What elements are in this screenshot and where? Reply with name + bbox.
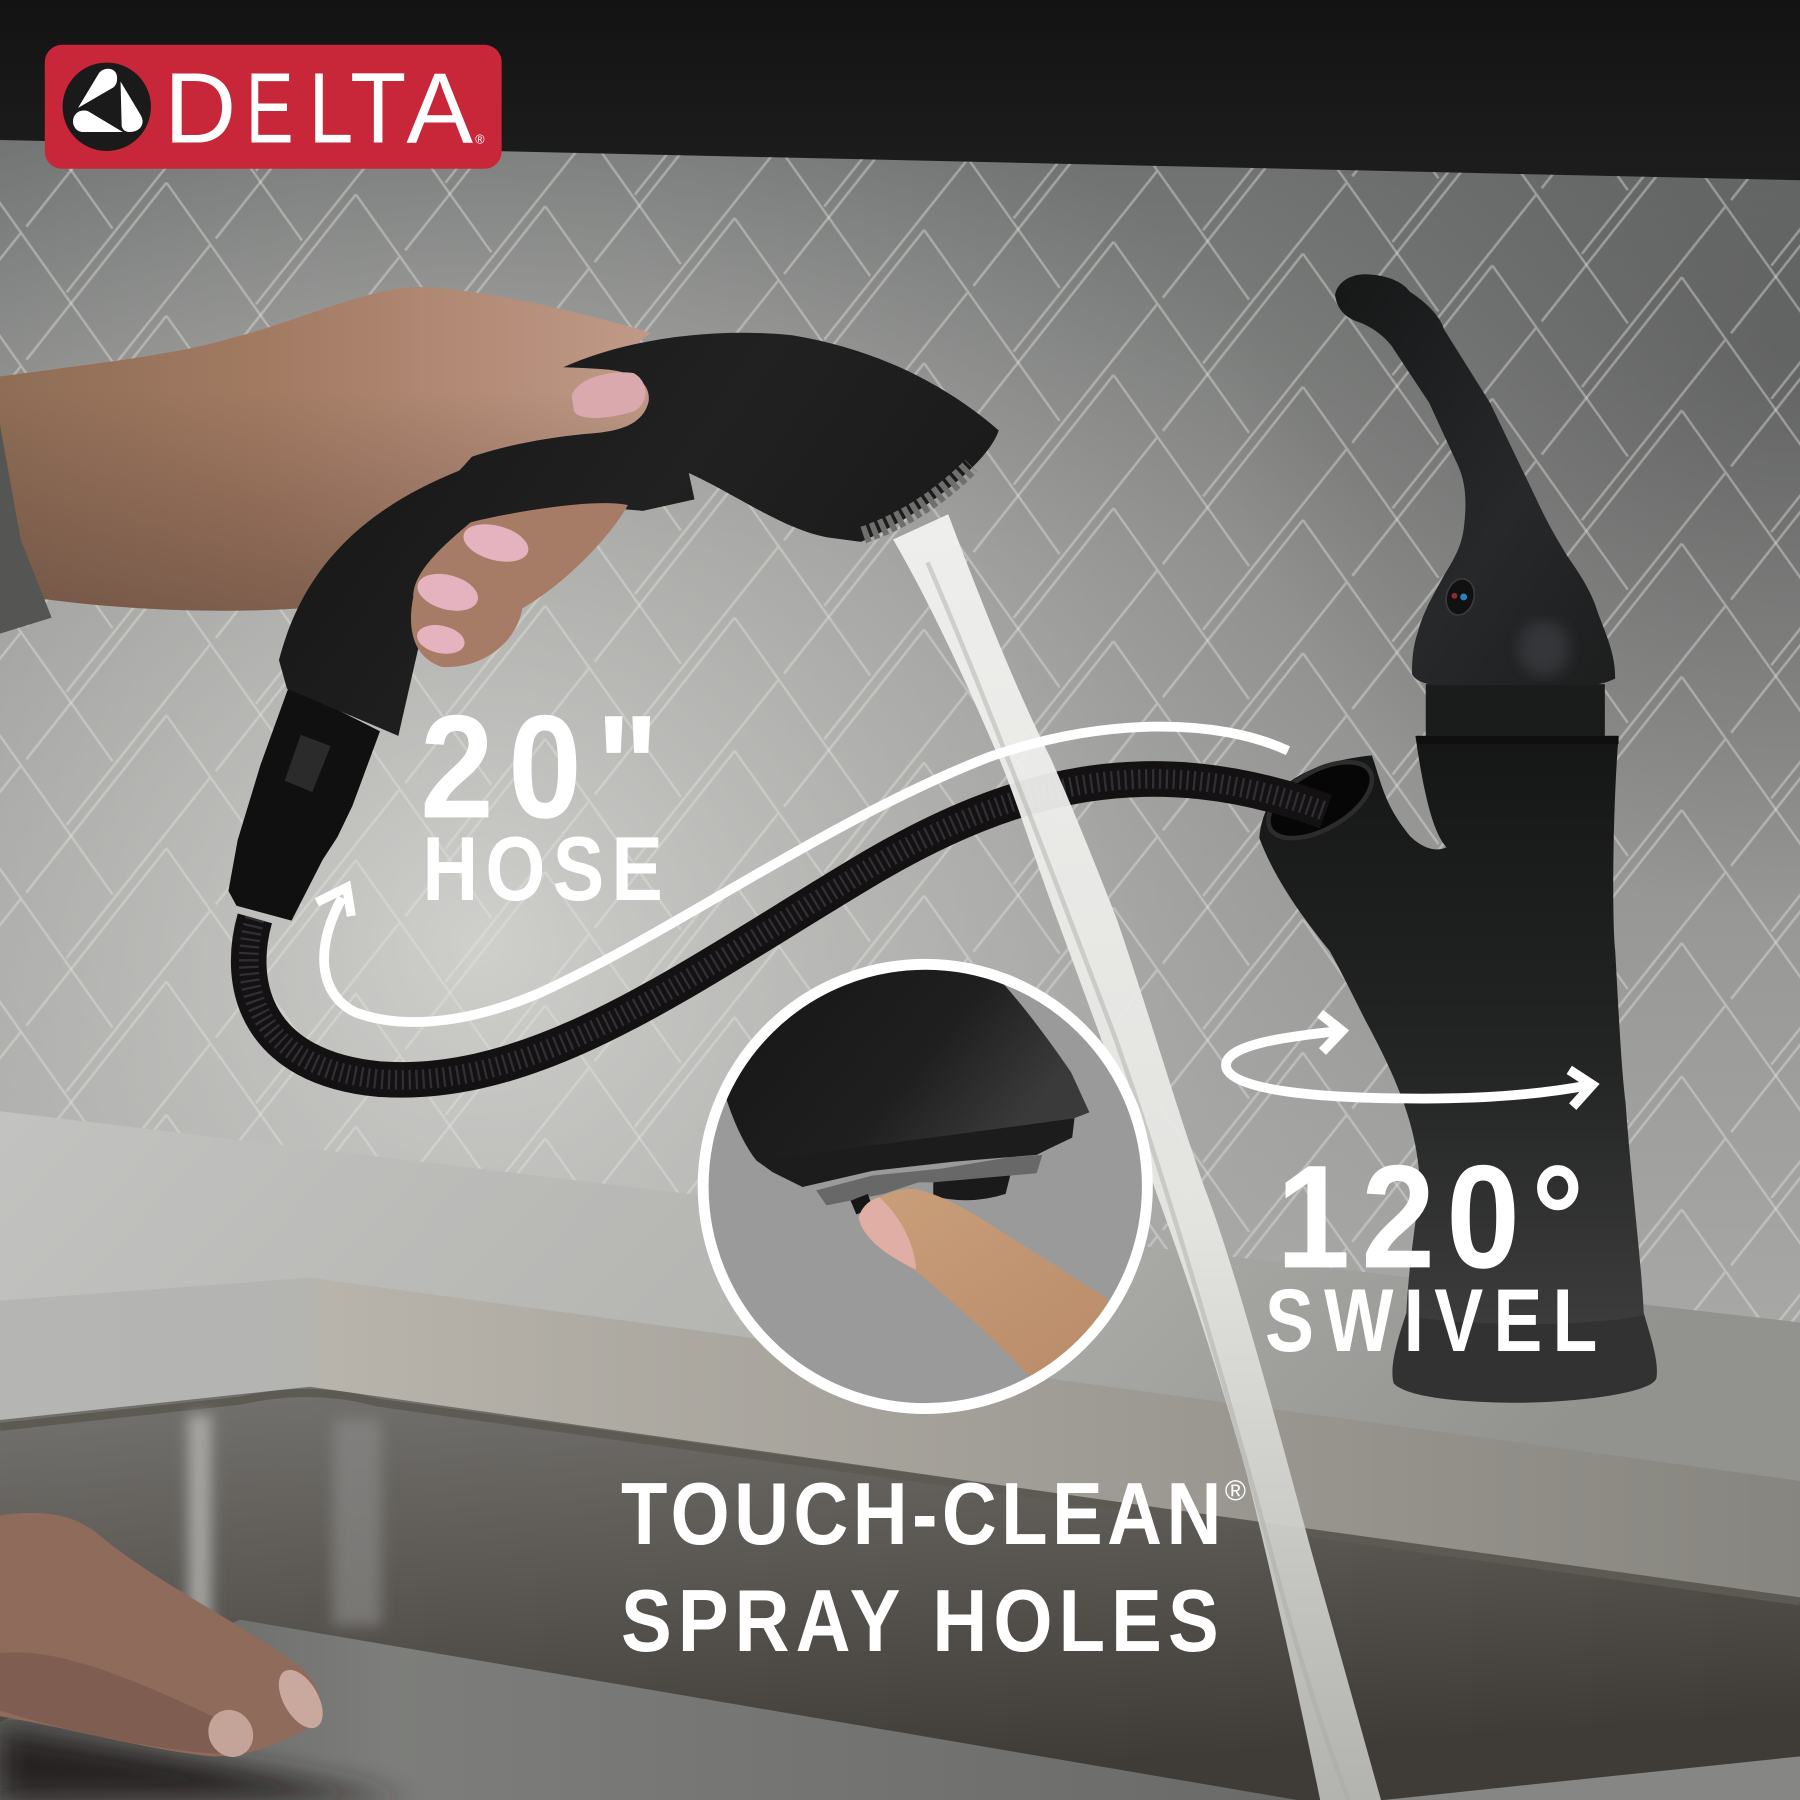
sprayer head (726, 970, 1090, 1161)
water stream (893, 514, 1381, 1800)
pull-out sprayer (228, 333, 999, 921)
counter front edge (0, 1278, 1800, 1599)
resting hand (0, 1513, 332, 1765)
front counter (0, 1620, 1297, 1800)
spray nozzle (863, 466, 971, 535)
thumb nail (572, 372, 645, 418)
finger nails (413, 518, 533, 658)
logo: Delta (45, 45, 502, 169)
lower fingers (411, 503, 628, 667)
logo wordmark: E (246, 53, 294, 164)
left hand holding sprayer (0, 287, 651, 634)
logo wordmark: L (309, 53, 353, 164)
tile wall (0, 115, 1800, 1378)
far right counter (1383, 1756, 1800, 1800)
foreground shadow (0, 1728, 413, 1800)
gear ring (816, 1155, 1042, 1205)
callout heading: touch-clean spray holes (621, 1465, 1246, 1670)
hot-cold indicator (1442, 576, 1478, 618)
thumb and fingers (356, 367, 649, 667)
spray face (757, 1118, 1074, 1187)
dark upper cabinet band (0, 0, 1800, 180)
hand back (0, 287, 651, 611)
sleeve (0, 425, 52, 634)
centre nozzle (933, 1176, 1010, 1200)
callout: 20 inch hose (317, 684, 1288, 1022)
finger (858, 1188, 1109, 1376)
callout: 120 degree swivel (1226, 1014, 1607, 1371)
spray tab (851, 1194, 872, 1215)
hose (249, 779, 1326, 1080)
inset circle: touch-clean spray holes (689, 918, 1148, 1409)
hose label: HOSE (422, 818, 670, 919)
sprayer body (279, 333, 999, 736)
finger nail (859, 1197, 916, 1270)
connector highlight (285, 735, 331, 792)
registered mark: ® (1225, 1475, 1246, 1507)
swivel arrow (1226, 1014, 1592, 1107)
logo registered mark: ® (475, 132, 485, 146)
inset ring (703, 964, 1147, 1409)
logo wordmark (164, 53, 473, 164)
lever handle (1335, 274, 1615, 685)
faucet (1256, 274, 1657, 1403)
logo wordmark: T (350, 53, 406, 164)
hose measurement: 20" (420, 684, 673, 849)
counter top surface (0, 1111, 1800, 1492)
faucet body and spout (1259, 736, 1644, 1324)
collar lip (1417, 736, 1619, 744)
heading line one: TOUCH-CLEAN (621, 1465, 1226, 1563)
thumb shading (356, 367, 649, 505)
swivel measurement: 120° (1277, 1134, 1595, 1299)
spout opening (1256, 747, 1384, 854)
sprayer connector (228, 685, 380, 921)
faucet base (1392, 1313, 1657, 1403)
heading line two: SPRAY HOLES (621, 1571, 1225, 1670)
thumb (356, 367, 649, 505)
logo wordmark: D (164, 53, 236, 164)
swivel label: SWIVEL (1265, 1271, 1607, 1371)
sink basin (0, 1387, 1800, 1800)
palm shading (0, 287, 651, 611)
sink rim (0, 1393, 1800, 1601)
logo wordmark: A (406, 53, 473, 164)
collar (1426, 684, 1605, 740)
logo emblem (63, 63, 151, 151)
hose arrow (317, 727, 1288, 1022)
logo badge (45, 45, 502, 169)
handle sheen (1519, 621, 1569, 676)
sink corner highlight (188, 1414, 381, 1627)
